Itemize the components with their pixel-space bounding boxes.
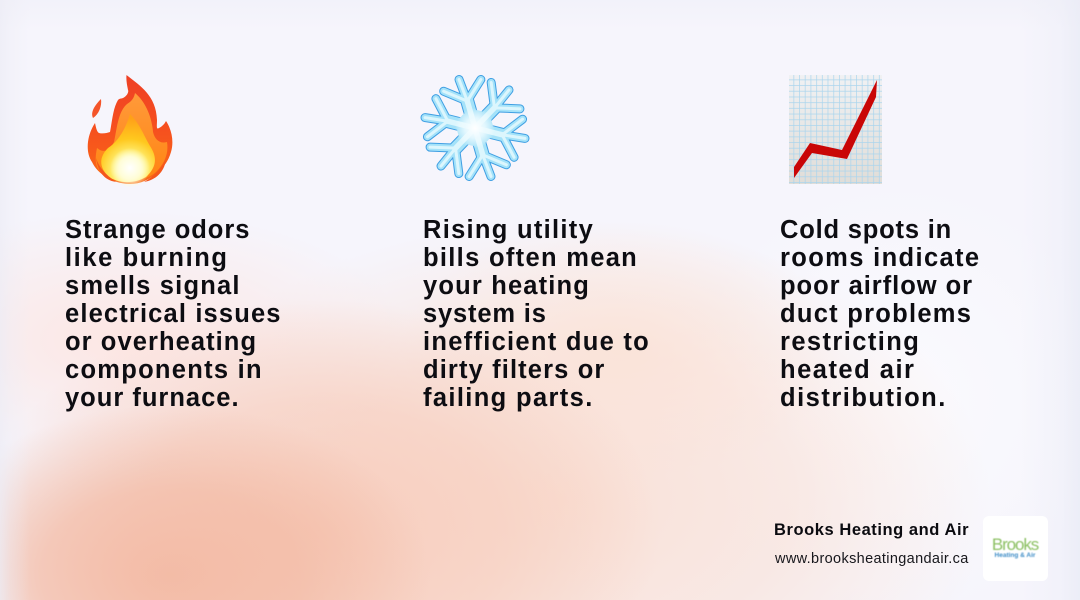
text: cold spots: heated air xyxy=(780,356,915,384)
text: rising utility bills: inefficient due to xyxy=(423,328,650,356)
icon: chart increasing xyxy=(789,75,882,184)
text: strange odors xyxy=(65,216,282,412)
text: rising utility bills: your heating xyxy=(423,272,590,300)
text: cold spots xyxy=(780,216,980,412)
text: rising utility bills: Rising utility xyxy=(423,216,594,244)
text: cold spots: rooms indicate xyxy=(780,244,980,272)
logo card xyxy=(983,516,1048,581)
text: strange odors: electrical issues xyxy=(65,300,282,328)
text: cold spots: restricting xyxy=(780,328,920,356)
footer: website: www.brooksheatingandair.ca xyxy=(775,551,969,567)
text: strange odors: or overheating xyxy=(65,328,257,356)
text: rising utility bills: system is xyxy=(423,300,547,328)
text: cold spots: distribution. xyxy=(780,384,947,412)
text: cold spots: duct problems xyxy=(780,300,972,328)
logo wordmark: Heating & Air xyxy=(995,552,1035,559)
logo wordmark: Brooks xyxy=(992,535,1038,554)
text: rising utility bills: bills often mean xyxy=(423,244,638,272)
text: strange odors: components in xyxy=(65,356,263,384)
footer: company name: Brooks Heating and Air xyxy=(774,521,969,539)
text: strange odors: your furnace. xyxy=(65,384,240,412)
icon: fire xyxy=(88,75,172,186)
text: cold spots: Cold spots in xyxy=(780,216,952,244)
text: rising utility bills: dirty filters or xyxy=(423,356,605,384)
text: strange odors: like burning xyxy=(65,244,229,272)
icon: snowflake xyxy=(420,75,530,181)
text: rising utility bills xyxy=(423,216,650,412)
text: strange odors: smells signal xyxy=(65,272,241,300)
text: strange odors: Strange odors xyxy=(65,216,250,244)
text: rising utility bills: failing parts. xyxy=(423,384,594,412)
text: cold spots: poor airflow or xyxy=(780,272,973,300)
